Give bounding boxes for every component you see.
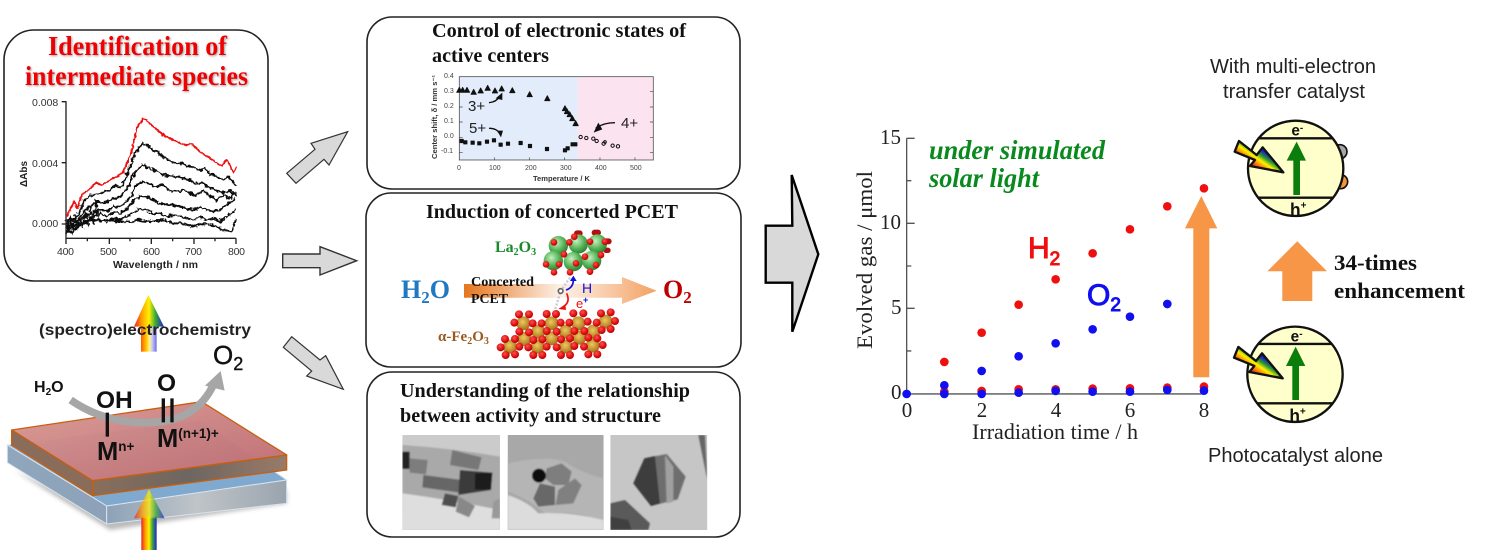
chart: evolved gas versus irradiation time: 4 <box>1051 398 1062 422</box>
label: H2: H <box>1028 232 1050 265</box>
heading: activity and structure: between activity and structure <box>400 405 661 427</box>
label: H2O: O <box>430 275 450 304</box>
label: photocatalyst alone: Photocatalyst alone <box>1208 445 1383 467</box>
chart: center shift versus temperature: 0.2 <box>444 103 454 110</box>
chart: absorbance spectra: 500 <box>100 246 117 258</box>
curved gray arrow <box>71 371 225 423</box>
label: La2O3: 2 <box>514 247 519 258</box>
chart: center shift versus temperature: 500 <box>630 165 642 172</box>
diagram: proton and electron transfer: e <box>576 296 583 311</box>
chart: absorbance spectra: 700 <box>185 246 202 258</box>
label: La2O3: 3 <box>531 247 536 258</box>
chart: center shift versus temperature: 0.3 <box>444 88 454 95</box>
panel: identification of intermediate species <box>4 30 268 281</box>
diagram: electrode with water oxidation: M <box>97 438 118 466</box>
label: alpha-Fe2O3: O <box>472 329 484 345</box>
chart: center shift versus temperature <box>430 73 653 183</box>
chart: evolved gas versus irradiation time: Evolved gas / μmol <box>852 171 877 349</box>
label: concerted PCET process: Concerted <box>471 275 534 290</box>
diagram: photocatalyst with co-catalyst: e <box>1291 123 1300 140</box>
label: O2: 2 <box>1110 295 1121 316</box>
label: alpha-Fe2O3: 2 <box>467 336 472 347</box>
chart: absorbance spectra <box>19 97 245 271</box>
chart: center shift versus temperature: 0.0 <box>444 133 454 140</box>
panel: activity and structure <box>367 372 740 537</box>
diagram: electrode with water oxidation: H <box>34 379 46 396</box>
label: 34-times enhancement <box>1334 250 1466 303</box>
chart: center shift versus temperature: 0.4 <box>444 73 454 80</box>
chart: center shift versus temperature: Center shift, δ / mm s⁻¹ <box>430 74 439 159</box>
label: with catalyst: With multi-electron <box>1210 56 1376 78</box>
heading: control <box>432 20 686 67</box>
diagram: proton and electron transfer: + <box>583 295 588 305</box>
chart: absorbance spectra: 0.004 <box>32 158 58 170</box>
diagram: proton and electron transfer: H <box>582 280 592 296</box>
label: H2: 2 <box>1050 249 1060 270</box>
crystal: alpha-Fe2O3 <box>497 308 619 359</box>
diagram: electrode with water oxidation: (n+1)+ <box>178 426 219 441</box>
label: 34-times enhancement: enhancement <box>1334 278 1466 303</box>
diagram: electrode with water oxidation: 2 <box>46 387 52 398</box>
arrow: to electronic states <box>287 132 348 183</box>
label: concerted PCET process: PCET <box>471 292 509 307</box>
diagram: electrode with water oxidation: OH <box>96 387 133 414</box>
chart: evolved gas versus irradiation time: 6 <box>1125 398 1135 422</box>
diagram: photocatalyst with co-catalyst: + <box>1301 201 1307 212</box>
label: O2: O <box>663 275 683 304</box>
diagram: electrode with water oxidation: O <box>51 379 64 396</box>
label: O2: 2 <box>683 288 692 307</box>
chart: center shift versus temperature: Temperature / K <box>533 174 591 183</box>
diagram: photocatalyst alone: h <box>1289 405 1300 425</box>
arrow: rainbow upward arrow <box>134 295 164 352</box>
heading: identification: intermediate species <box>25 61 248 91</box>
chart: evolved gas versus irradiation time: 15 <box>880 125 901 149</box>
diagram: photocatalyst alone: + <box>1300 407 1306 418</box>
label: 34-times enhancement: 34-times <box>1334 250 1417 275</box>
photo: large hexagon particle <box>610 435 707 530</box>
chart: center shift versus temperature: 300 <box>560 165 572 172</box>
label: alpha-Fe2O3: 3 <box>484 336 489 347</box>
chart: center shift versus temperature: 5+ <box>469 120 486 137</box>
chart: center shift versus temperature: 100 <box>489 165 501 172</box>
blue substrate plate <box>7 420 287 524</box>
chart: absorbance spectra: 400 <box>57 246 74 258</box>
chart: center shift versus temperature: 4+ <box>621 115 638 132</box>
chart: evolved gas versus irradiation time: 5 <box>891 295 902 319</box>
label: H2O: 2 <box>421 288 430 307</box>
chart: absorbance spectra: 0.000 <box>32 218 58 230</box>
chart: evolved gas versus irradiation time: 2 <box>977 398 987 422</box>
crystal: La2O3 <box>543 230 612 276</box>
diagram: electrode with water oxidation: n+ <box>118 439 134 454</box>
arrow: enhancement <box>1267 241 1327 301</box>
chart: evolved gas versus irradiation time: 10 <box>880 210 901 234</box>
label: under simulated solar light: under simulated <box>929 135 1105 165</box>
diagram: electrode with water oxidation: 2 <box>233 354 243 374</box>
label: La2O3: La <box>495 239 514 256</box>
heading: identification <box>25 31 248 91</box>
chart: absorbance spectra: 600 <box>143 246 160 258</box>
diagram: photocatalyst alone <box>1234 327 1343 425</box>
label: concerted PCET process <box>471 275 534 307</box>
heading: control: Control of electronic states of <box>432 20 686 42</box>
chart: absorbance spectra: 0.008 <box>32 97 58 109</box>
photo: hexagonal particles <box>508 435 604 530</box>
diagram: photocatalyst alone: e <box>1291 329 1299 346</box>
hydrogen points <box>940 184 1208 396</box>
chart: evolved gas versus irradiation time: 0 <box>891 380 902 404</box>
arrow: to structure <box>283 337 343 389</box>
label: La2O3: O <box>519 239 531 256</box>
diagram: photocatalyst with co-catalyst: h <box>1290 199 1301 219</box>
chart: center shift versus temperature: 400 <box>595 165 607 172</box>
panel: control of electronic states <box>367 17 740 189</box>
label: O2: O <box>1087 279 1110 312</box>
oxygen points <box>902 300 1208 398</box>
diagram: photocatalyst alone: - <box>1299 329 1303 340</box>
lower rainbow arrow <box>134 489 165 550</box>
heading: identification: Identification of <box>48 31 228 61</box>
chart: evolved gas versus irradiation time: Irradiation time / h <box>972 419 1138 444</box>
chart: center shift versus temperature: 3+ <box>468 98 485 115</box>
heading: control: active centers <box>432 45 549 67</box>
arrow: large gray block arrow <box>766 175 818 332</box>
diagram: photocatalyst with co-catalyst: - <box>1300 123 1303 134</box>
chart: center shift versus temperature: 200 <box>525 165 537 172</box>
chart: center shift versus temperature: -0.1 <box>441 148 453 155</box>
chart: absorbance spectra: Wavelength / nm <box>113 259 198 271</box>
label: alpha-Fe2O3: α-Fe <box>438 329 467 345</box>
chart: evolved gas versus irradiation time: 0 <box>902 398 912 422</box>
chart: evolved gas versus irradiation time <box>852 125 1217 444</box>
label: with catalyst <box>1210 56 1376 103</box>
heading: activity and structure: Understanding of the relationship <box>400 380 690 402</box>
chart: absorbance spectra: ΔAbs <box>19 160 30 187</box>
diagram: electrode with water oxidation: O <box>157 370 176 397</box>
chart: absorbance spectra: 800 <box>228 246 245 258</box>
chart: center shift versus temperature: 0.1 <box>444 118 454 125</box>
arrow: H2O to O2 <box>464 277 657 304</box>
label: under simulated solar light <box>928 135 1105 193</box>
diagram: photocatalyst with co-catalyst <box>1235 121 1348 219</box>
label: under simulated solar light: solar light <box>928 163 1040 193</box>
diagram: electrode with water oxidation: O <box>213 340 233 370</box>
arrow: to concerted PCET <box>283 247 357 275</box>
label: H2O: H <box>401 275 421 304</box>
label: spectroelectrochemistry: (spectro)electrochemistry <box>39 322 251 339</box>
diagram: electrode with water oxidation <box>7 340 287 550</box>
label: with catalyst: transfer catalyst <box>1223 81 1365 103</box>
diagram: electrode with water oxidation: M <box>157 425 178 453</box>
chart: evolved gas versus irradiation time: 8 <box>1199 398 1209 422</box>
orange enhancement arrow <box>1185 196 1217 377</box>
heading: activity and structure <box>400 380 690 427</box>
photo: cubic particles <box>402 435 500 530</box>
diagram: proton and electron transfer <box>555 276 592 311</box>
heading: concerted PCET: Induction of concerted PCET <box>426 201 679 223</box>
panel: concerted PCET <box>366 193 741 367</box>
chart: center shift versus temperature: 0 <box>457 165 461 172</box>
orange top plate <box>12 402 287 496</box>
